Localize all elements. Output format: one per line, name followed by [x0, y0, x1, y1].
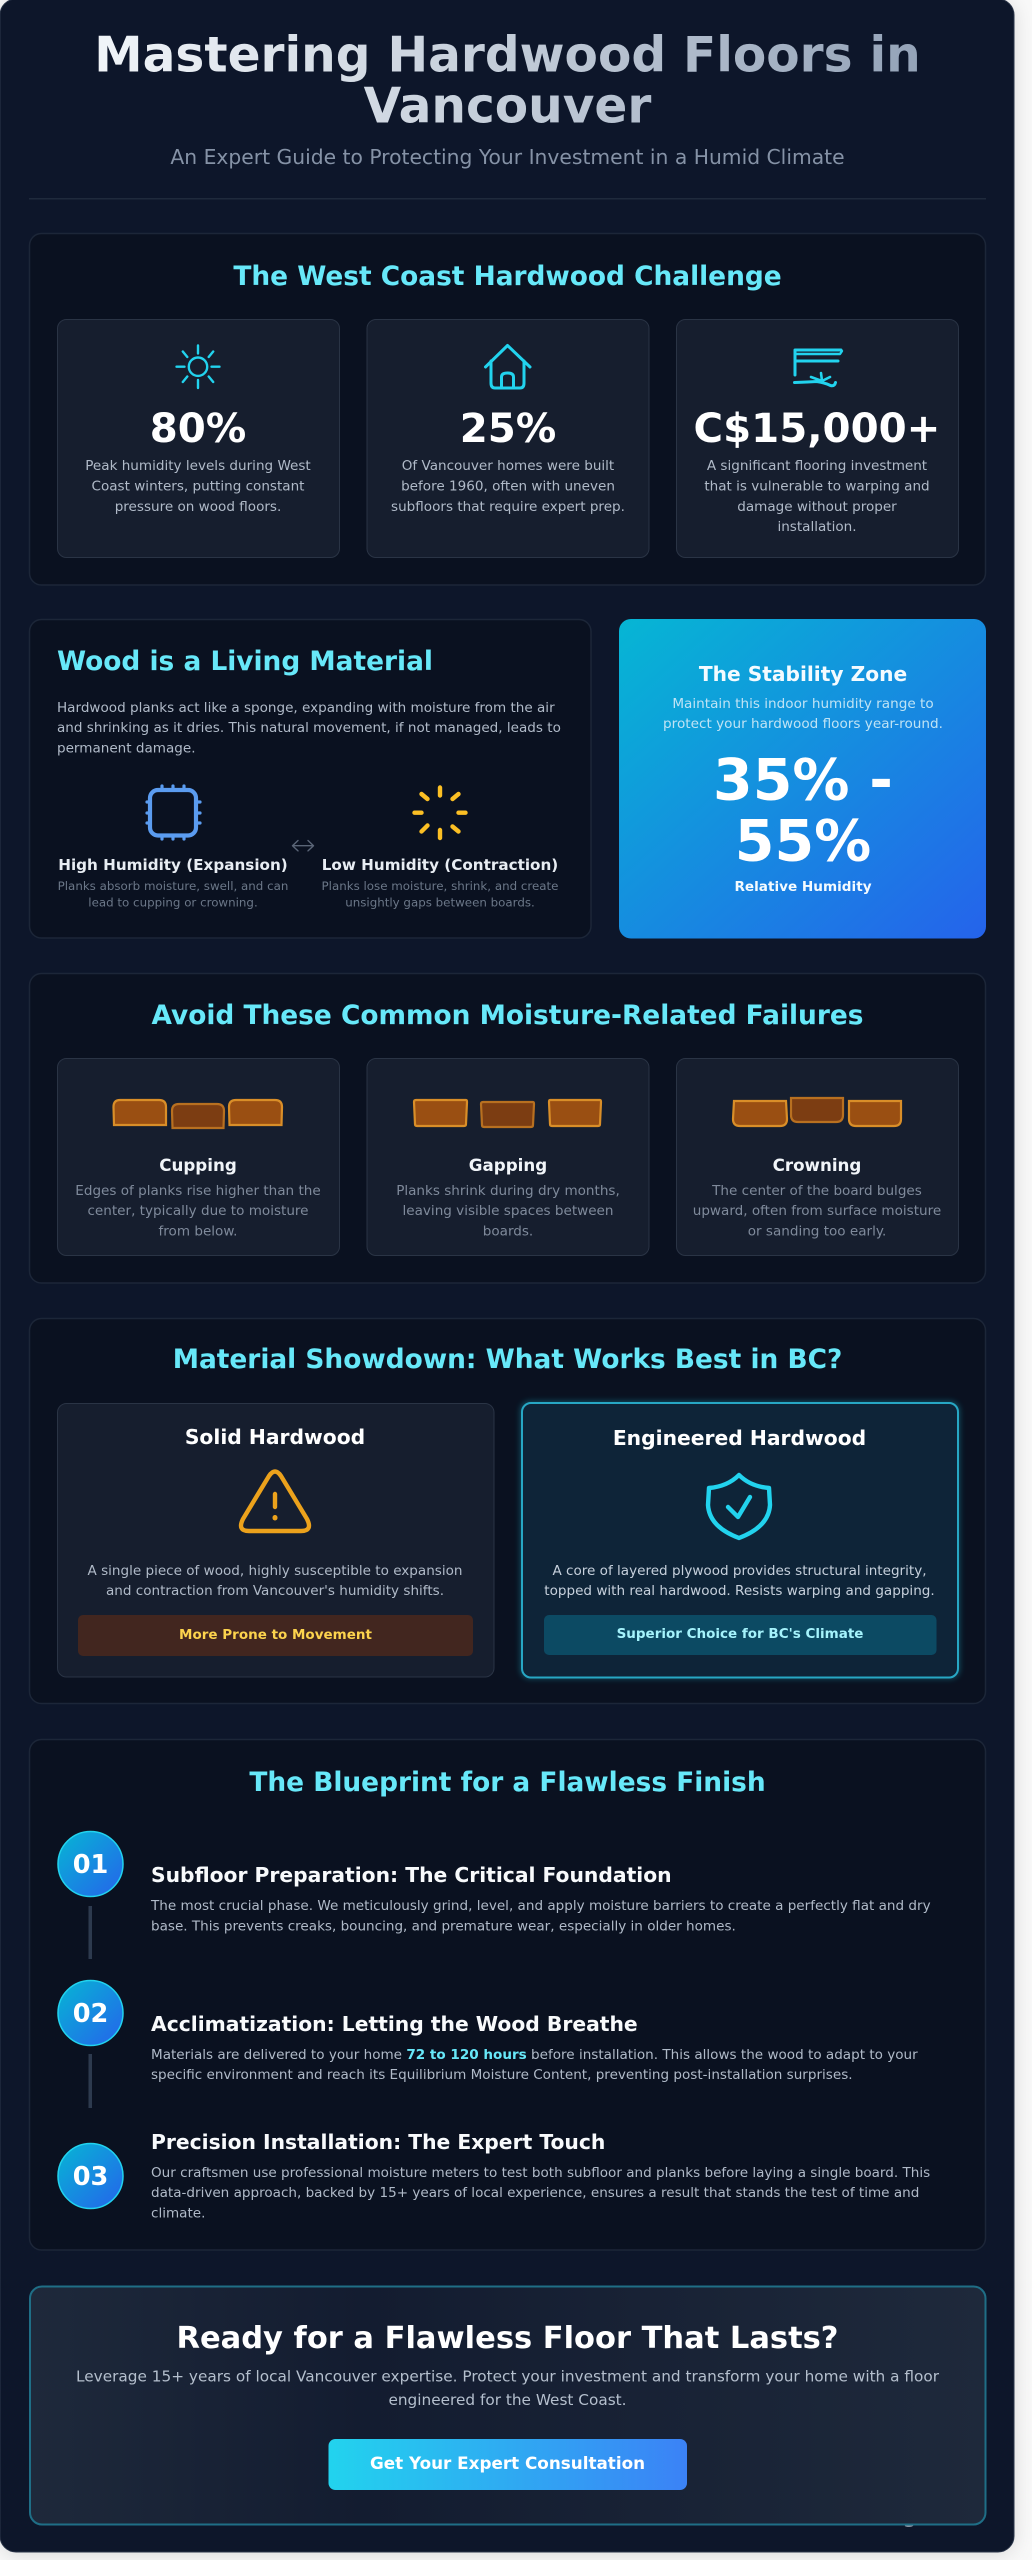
- icon: sun: [176, 346, 220, 388]
- heading: living material: Wood is a Living Material: [57, 646, 433, 677]
- panel: blueprint timeline: [30, 1740, 986, 2250]
- icon: shield check: [708, 1475, 770, 1538]
- arrow: between humidity states: [292, 840, 314, 851]
- panel: stability zone: Maintain this indoor humidity range to: [672, 696, 934, 712]
- stat card: C$15,000+: damage without proper: [737, 499, 897, 515]
- text: explanation: and shrinking as it dries. This natural movement, if not managed, leads to: [57, 720, 561, 736]
- icon: cupped planks: [114, 1100, 282, 1128]
- step 03: 03: [73, 2162, 108, 2192]
- button: consultation: Get Your Expert Consultation: [370, 2453, 645, 2473]
- step 03: [58, 2130, 930, 2222]
- card: solid hardwood: and contraction from Vancouver's humidity shifts.: [106, 1583, 444, 1599]
- card: engineered hardwood: topped with real hardwood. Resists warping and gapping.: [544, 1583, 935, 1599]
- panel: stability zone: 55%: [735, 808, 871, 874]
- heading: showdown: Material Showdown: What Works Best in BC?: [173, 1344, 842, 1375]
- card: engineered hardwood: A core of layered plywood provides structural integrity,: [552, 1563, 927, 1579]
- step 03: Precision Installation: The Expert Touch: [151, 2130, 605, 2154]
- text: low humidity: Planks lose moisture, shrink, and create: [322, 879, 558, 893]
- heading: failures: Avoid These Common Moisture-Related Failures: [152, 1000, 863, 1031]
- panel: stability zone: [619, 619, 986, 938]
- icon: gapped planks: [414, 1100, 601, 1127]
- stat card: 80%: 80%: [150, 405, 246, 452]
- panel: common failures: [30, 974, 986, 1283]
- stat card: 80%: [58, 320, 340, 558]
- text: low humidity: Low Humidity (Contraction): [322, 856, 558, 874]
- text: high humidity: lead to cupping or crowning.: [88, 896, 258, 910]
- badge: prone to movement: [78, 1615, 473, 1656]
- text: high humidity: [58, 856, 288, 910]
- stat card: 25%: 25%: [460, 405, 556, 452]
- panel: stability zone: Relative Humidity: [734, 879, 872, 895]
- text: high humidity: Planks absorb moisture, swell, and can: [58, 879, 288, 893]
- panel: wood is a living material: [30, 620, 591, 938]
- text: explanation: permanent damage.: [57, 740, 196, 756]
- card: gapping: leaving visible spaces between: [403, 1203, 613, 1219]
- icon: damaged plank: [794, 350, 842, 386]
- step 02: Acclimatization: Letting the Wood Breathe: [151, 2012, 638, 2036]
- card: crowning: upward, often from surface moisture: [693, 1203, 941, 1219]
- step 03: climate.: [151, 2206, 205, 2222]
- card: crowning: [676, 1058, 958, 1256]
- heading: cta: Ready for a Flawless Floor That Lasts?: [176, 2321, 839, 2356]
- icon: house: [486, 346, 530, 388]
- panel: call to action: [30, 2286, 986, 2524]
- card: cupping: center, typically due to moisture: [87, 1203, 309, 1219]
- badge: superior choice: [544, 1615, 936, 1655]
- step 02: Materials are delivered to your home 72 to 120 hours before installation. This allows the wood to adapt to your: [151, 2047, 918, 2063]
- card: solid hardwood: Solid Hardwood: [185, 1425, 365, 1449]
- stat card: C$15,000+: that is vulnerable to warping and: [704, 478, 930, 494]
- panel: stability zone: The Stability Zone: [699, 662, 907, 686]
- icon: expansion chip: [147, 786, 200, 839]
- title: Vancouver: [364, 78, 651, 134]
- card: crowning: Crowning: [773, 1155, 861, 1175]
- stat card: 80%: Peak humidity levels during West: [85, 458, 311, 474]
- step 01: 01: [73, 1850, 108, 1880]
- step 02: specific environment and reach its Equilibrium Moisture Content, preventing post-installation surprises.: [151, 2067, 853, 2083]
- stat card: C$15,000+: C$15,000+: [694, 405, 940, 452]
- text: cta description: Leverage 15+ years of local Vancouver expertise. Protect your investment and transform your home with a floor: [76, 2368, 940, 2386]
- panel: west coast challenge: [30, 234, 986, 585]
- card: solid hardwood: [58, 1404, 494, 1677]
- card: engineered hardwood: Engineered Hardwood: [613, 1426, 866, 1450]
- card: cupping: Cupping: [159, 1155, 237, 1175]
- text: low humidity: [322, 856, 558, 910]
- panel: stability zone: 35% -: [713, 748, 893, 814]
- panel: material showdown: [30, 1318, 986, 1704]
- stat card: 80%: Coast winters, putting constant: [92, 478, 304, 494]
- step 01: [58, 1832, 931, 1959]
- text: cta description: [76, 2368, 940, 2409]
- button: consultation: [328, 2439, 687, 2490]
- text: explanation: [57, 700, 561, 756]
- stat card: 25%: [367, 320, 649, 558]
- step 01: base. This prevents creaks, bouncing, and premature wear, especially in older homes.: [151, 1918, 736, 1934]
- stat card: 25%: Of Vancouver homes were built: [402, 458, 614, 474]
- card: gapping: [367, 1058, 649, 1256]
- icon: contraction rays: [414, 788, 466, 838]
- card: cupping: from below.: [159, 1224, 237, 1240]
- badge: superior choice: Superior Choice for BC's Climate: [617, 1626, 863, 1642]
- card: gapping: boards.: [483, 1224, 533, 1240]
- step 01: The most crucial phase. We meticulously grind, level, and apply moisture barriers to create a perfectly flat and dry: [150, 1898, 931, 1914]
- card: engineered hardwood: [520, 1401, 960, 1679]
- panel: stability zone: protect your hardwood floors year-round.: [663, 716, 943, 732]
- card: cupping: Edges of planks rise higher than the: [75, 1183, 321, 1199]
- card: crowning: or sanding too early.: [748, 1224, 886, 1240]
- card: cupping: [58, 1058, 340, 1256]
- stat card: 25%: before 1960, often with uneven: [401, 478, 615, 494]
- step 03: Our craftsmen use professional moisture meters to test both subfloor and planks before laying a single board. This: [151, 2165, 930, 2181]
- stat card: 25%: subfloors that require expert prep.: [391, 499, 625, 515]
- stat card: C$15,000+: [676, 320, 958, 558]
- header: [94, 28, 921, 169]
- badge: prone to movement: More Prone to Movement: [179, 1627, 372, 1643]
- step 02: [58, 1980, 918, 2108]
- text: low humidity: unsightly gaps between boards.: [345, 896, 535, 910]
- icon: crowned planks: [733, 1098, 901, 1126]
- step 01: Subfloor Preparation: The Critical Foundation: [151, 1863, 672, 1887]
- subtitle: An Expert Guide to Protecting Your Investment in a Humid Climate: [170, 145, 845, 169]
- step 03: data-driven approach, backed by 15+ years of local experience, ensures a result that stands the test of time and: [151, 2185, 919, 2201]
- stat card: 80%: pressure on wood floors.: [115, 499, 281, 515]
- title: Mastering Hardwood Floors in: [94, 28, 921, 84]
- card: solid hardwood: A single piece of wood, highly susceptible to expansion: [88, 1563, 462, 1579]
- icon: warning: [241, 1472, 309, 1531]
- heading: challenge: The West Coast Hardwood Challenge: [233, 261, 782, 292]
- card: gapping: Planks shrink during dry months,: [396, 1183, 620, 1199]
- stat card: C$15,000+: installation.: [777, 519, 857, 535]
- card: gapping: Gapping: [469, 1155, 547, 1175]
- text: high humidity: High Humidity (Expansion): [58, 856, 288, 874]
- stat card: C$15,000+: A significant flooring investment: [707, 458, 927, 474]
- text: cta description: engineered for the West Coast.: [388, 2391, 627, 2409]
- step 02: 02: [73, 1999, 108, 2029]
- heading: blueprint: The Blueprint for a Flawless Finish: [249, 1767, 766, 1798]
- card: crowning: The center of the board bulges: [711, 1183, 922, 1199]
- text: explanation: Hardwood planks act like a sponge, expanding with moisture from the air: [57, 700, 555, 716]
- stray footer text fragment: g: [902, 2500, 917, 2528]
